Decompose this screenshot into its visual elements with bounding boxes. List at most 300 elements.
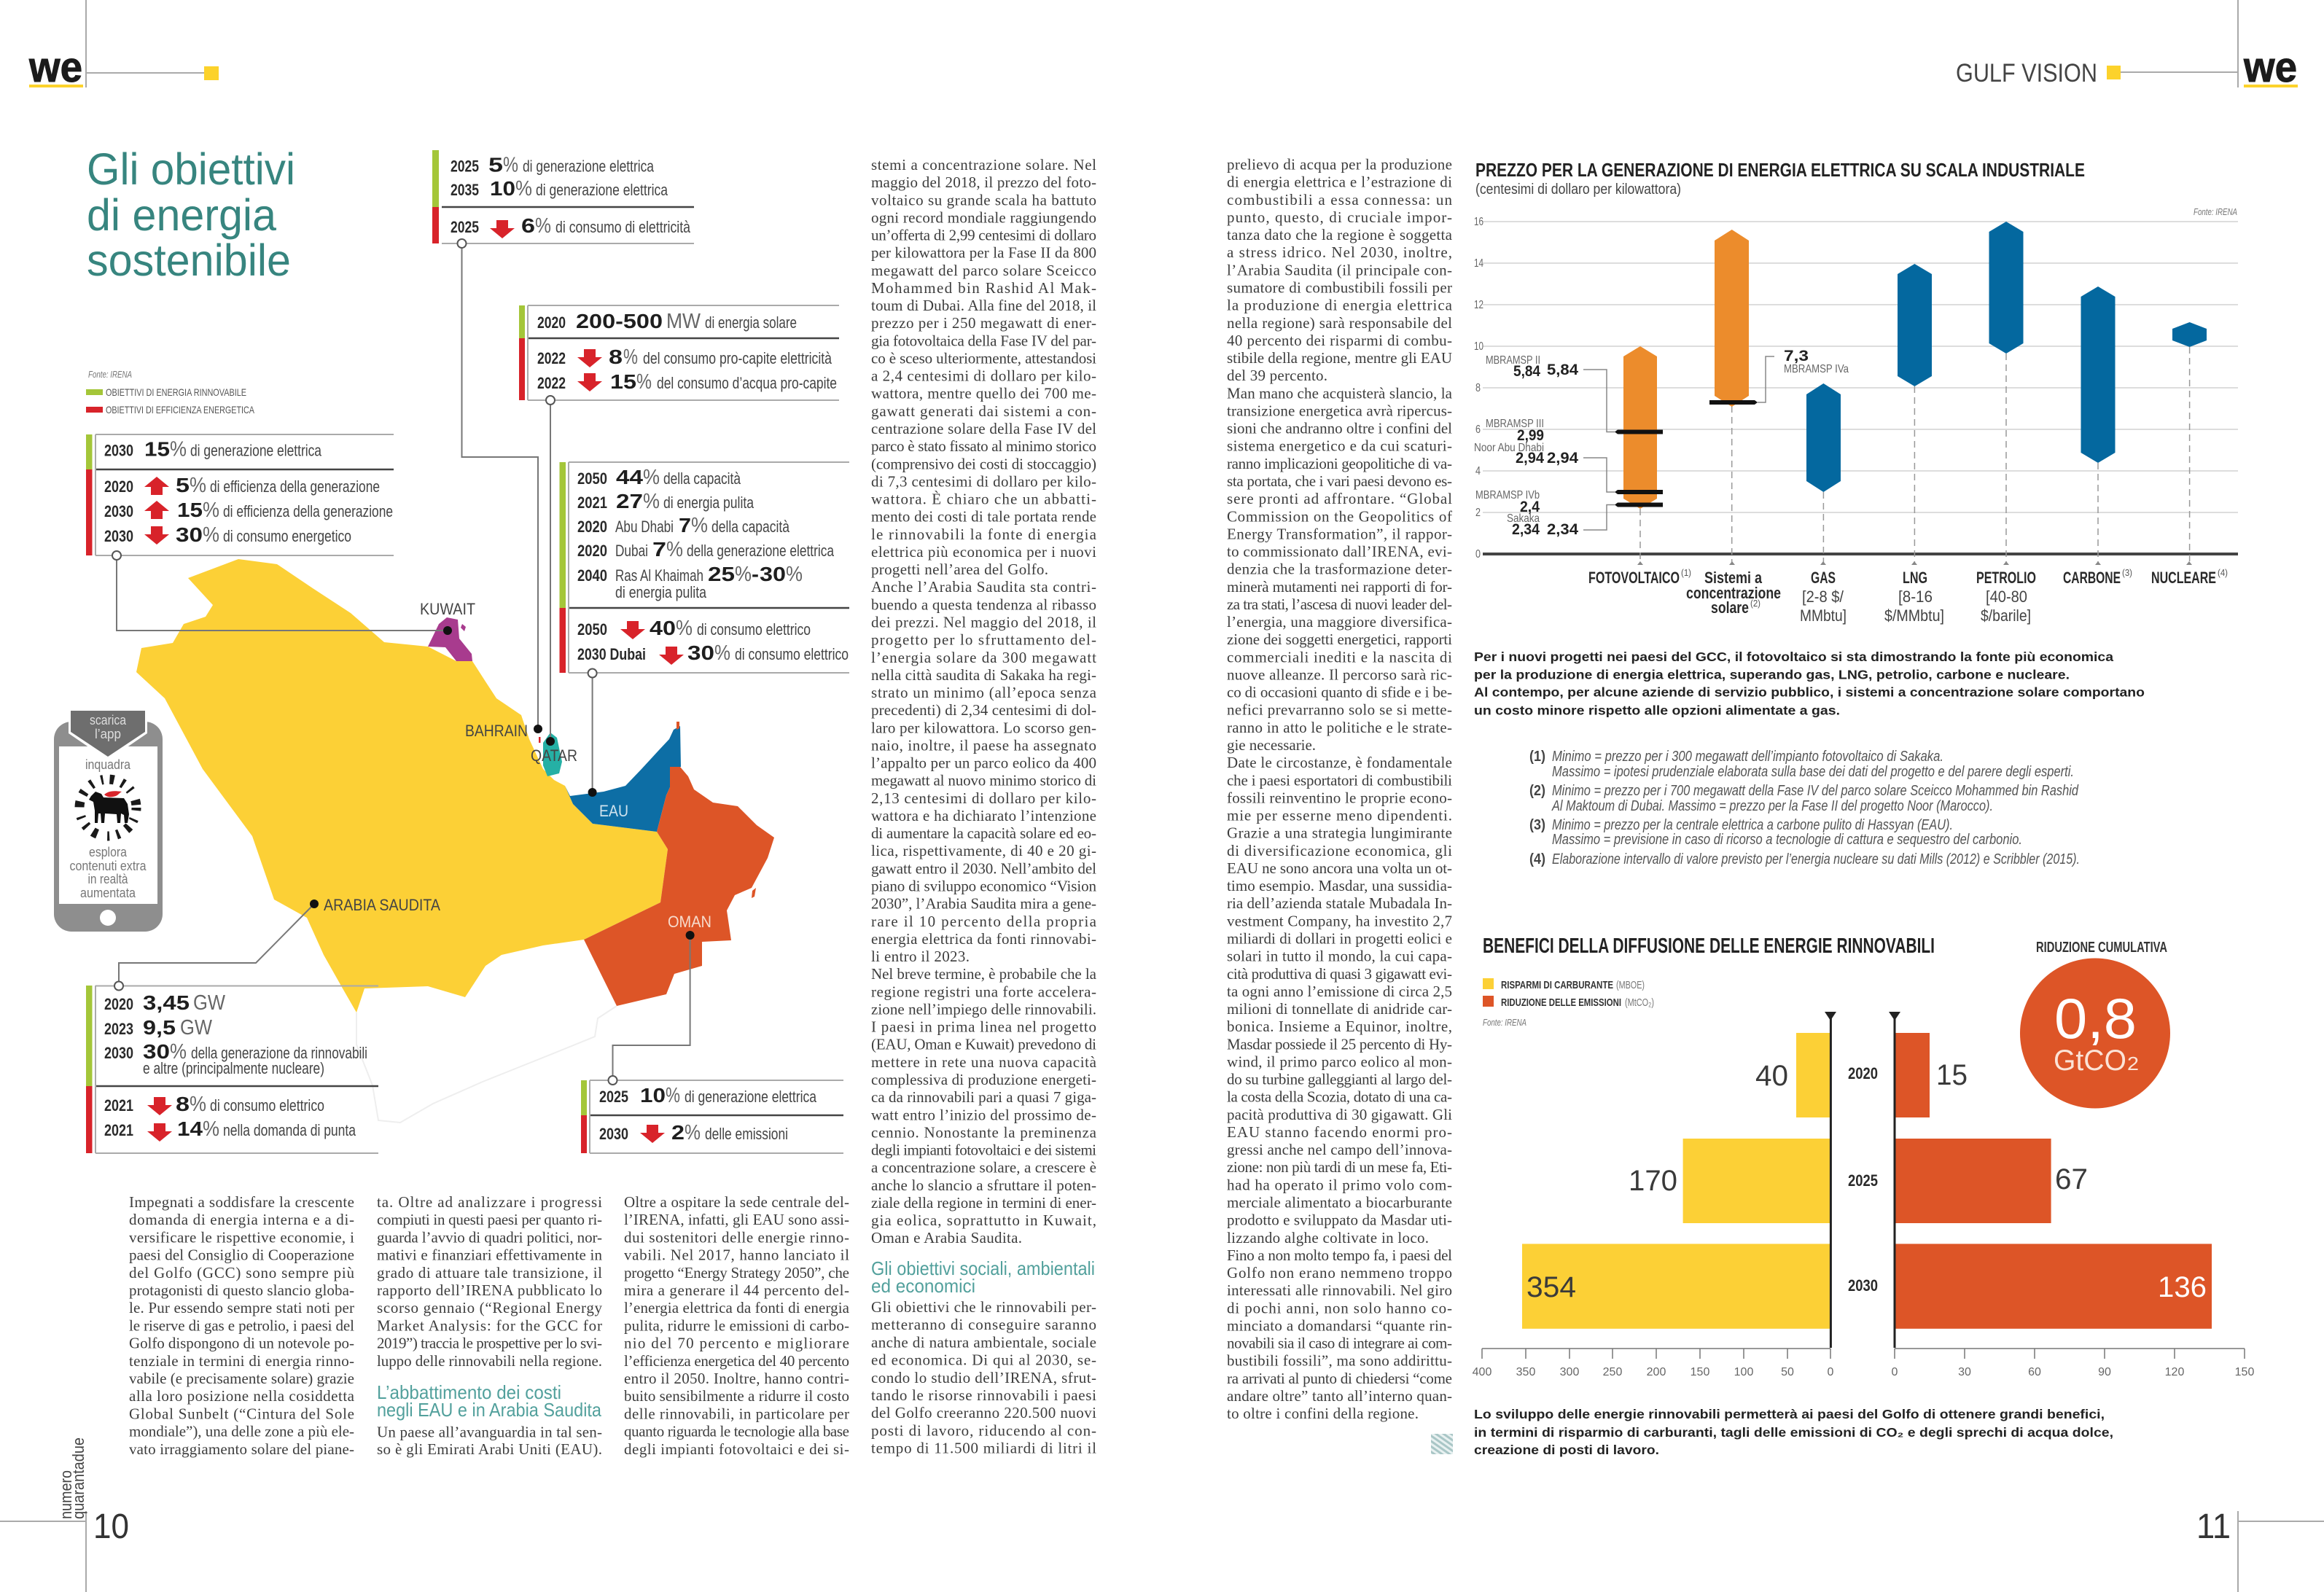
article column 5: di pochi anni, non solo hanno co-	[1227, 1299, 1452, 1316]
article column 3: quanto riguarda le tecnologie alla base	[624, 1423, 849, 1440]
box: UAE targets: %	[643, 490, 660, 513]
bar: solare a concentrazione	[1715, 230, 1749, 407]
icon: phone with augmented reality prompt: aumentata	[80, 886, 136, 900]
article column 5: gressi anche nel campo dell’innova-	[1227, 1141, 1452, 1158]
article column 1	[129, 1193, 355, 1458]
article column 5: novabili sia il caso di integrare ai com-	[1227, 1335, 1452, 1352]
box: UAE targets: %	[735, 563, 752, 586]
article column 5: merciale alimentato a biocarburante	[1227, 1194, 1452, 1211]
box: Kuwait targets: di consumo energetico	[223, 527, 351, 545]
article column 4 upper: gawatt generati dai sistemi a con-	[871, 402, 1096, 420]
map: Oman	[584, 722, 774, 1006]
box: Kuwait targets: 2030	[104, 442, 133, 459]
box: UAE targets: Dubai	[615, 542, 648, 560]
article column 2 upper: 2019”) traccia le prospettive per lo svi-	[377, 1335, 602, 1352]
chart heading: renewable benefits: BENEFICI DELLA DIFFUSIONE DELLE ENERGIE RINNOVABILI	[1483, 934, 1935, 958]
box: Saudi Arabia targets: 14	[177, 1117, 203, 1140]
x axes with scale labels: 60	[2028, 1366, 2041, 1378]
article column 4 upper: ca da rinnovabili pari a quasi 7 giga-	[871, 1088, 1096, 1106]
article column 4 upper: parco è stato fissato al minimo storico	[871, 437, 1096, 455]
box: Bahrain targets: 2035	[451, 181, 479, 199]
article column 4 upper: I paesi in prima linea nel progetto	[871, 1018, 1096, 1036]
box: Bahrain targets: %	[515, 177, 532, 200]
article column 5: to commissionato dall’IRENA, evi-	[1227, 543, 1452, 561]
box: UAE targets	[560, 462, 849, 678]
icon: phone with augmented reality prompt: l’app	[95, 727, 121, 741]
article column 2 upper: luppo delle rinnovabili nella regione.	[377, 1352, 602, 1370]
box: Saudi Arabia targets: della generazione da rinnovabili	[191, 1044, 367, 1062]
x axes with scale labels	[1473, 1349, 2254, 1378]
article column 3: mira a generare il 44 percento del-	[624, 1281, 849, 1299]
article column 4 upper: strato un minimo (all’epoca senza	[871, 684, 1097, 701]
article column 2 upper: guarda l’avvio di quadri politici, nor-	[377, 1228, 602, 1246]
header right: section name and logo: we	[2243, 44, 2297, 91]
central axes	[1825, 1012, 1900, 1348]
box: Saudi Arabia targets: GW	[193, 991, 226, 1015]
chart takeaway text: Al contempo, per alcune aziende di servizio pubblico, i sistemi a concentrazione solare comportano	[1474, 685, 2145, 700]
box: Oman targets: %	[666, 1084, 680, 1107]
benefits takeaway text: in termini di risparmio di carburanti, tagli delle emissioni di CO₂ e degli sprechi di acqua dolce,	[1474, 1425, 2113, 1440]
box: Saudi Arabia targets	[86, 981, 378, 1153]
article column 3: progetto “Energy Strategy 2050”, che	[624, 1264, 849, 1281]
chart grid and y axis labels: 14	[1474, 257, 1483, 270]
box: Saudi Arabia targets: 30	[143, 1040, 170, 1063]
article column 4 upper: buendo a questa tendenza al ribasso	[871, 596, 1096, 613]
article column 4 upper: (EAU, Oman e Kuwait) prevedono di	[871, 1036, 1096, 1053]
article column 1: protagonisti di questo slancio globa-	[129, 1281, 354, 1299]
article column 4 upper: centrazione solare della Fase IV del	[871, 420, 1096, 437]
article column 5: minerà mutamenti nei rapporti di for-	[1227, 578, 1452, 596]
legend: benefits chart	[1483, 978, 1654, 1028]
butterfly bar chart: fuel savings and emission reductions	[1473, 1012, 2254, 1378]
article column 3: pulita, ridurre le emissioni di carbo-	[624, 1316, 849, 1334]
chart heading: electricity generation price: (centesimi di dollaro per kilowattora)	[1475, 182, 1681, 198]
bar: LNG	[1898, 264, 1932, 386]
chart grid and y axis labels: 4	[1475, 465, 1481, 477]
chart takeaway text: Per i nuovi progetti nei paesi del GCC, il fotovoltaico si sta dimostrando la fonte più economica	[1474, 649, 2113, 664]
article column 5: tanza dato che la regione è soggetta	[1227, 226, 1453, 243]
country labels: EAU	[599, 802, 628, 820]
article column 4 upper: zione nell’impiego delle rinnovabili.	[871, 1000, 1096, 1018]
box: UAE targets: -	[752, 563, 759, 585]
year labels	[1848, 1064, 1878, 1295]
category labels: FOTOVOLTAICO	[1588, 569, 1680, 587]
price value labels: 2,94	[1547, 450, 1578, 467]
article column 5: EAU stanno facendo enormi pro-	[1227, 1123, 1452, 1141]
legend: benefits chart: RIDUZIONE DELLE EMISSIONI	[1501, 996, 1621, 1009]
icon: phone with augmented reality prompt	[54, 709, 163, 932]
article column 4 upper: (comprensivo dei costi di stoccaggio)	[871, 455, 1096, 472]
article column 4 upper: rare il 10 percento della propria	[871, 913, 1097, 930]
connector lines from boxes to countries	[117, 248, 690, 1076]
article column 4 upper: regione registri una forte accelera-	[871, 983, 1096, 1000]
icon: phone with augmented reality prompt: in realtà	[87, 872, 128, 886]
title: Gli obiettivi	[87, 144, 295, 194]
header left: logo and crop mark: we	[28, 44, 82, 91]
price value labels: 2,99	[1517, 427, 1544, 444]
article column 4 upper: le rinnovabili la fonte di energia	[871, 526, 1097, 543]
box: UAE targets: della capacità	[663, 469, 741, 488]
article column 3: Oltre a ospitare la sede centrale del-	[624, 1193, 849, 1211]
x axes with scale labels: 30	[1958, 1366, 1971, 1378]
box: Bahrain targets: 6	[521, 214, 535, 237]
category labels: LNG	[1903, 569, 1927, 587]
box: Bahrain targets: 5	[488, 153, 503, 176]
article column 4 upper: elettrica più economica per i nuovi	[871, 543, 1096, 561]
box: UAE targets: 25	[708, 563, 735, 585]
article column 4 upper: Oman e Arabia Saudita.	[871, 1229, 1022, 1246]
article column 1: del Golfo (GCC) sono sempre più	[129, 1264, 354, 1281]
price value labels: MBRAMSP II	[1486, 354, 1540, 367]
box: Oman targets: 2030	[599, 1125, 628, 1143]
country labels: QATAR	[531, 746, 577, 765]
article column 5: timo esempio. Masdar, una sussidia-	[1227, 877, 1452, 894]
callout: cumulative reduction	[2020, 940, 2170, 1108]
price value labels: 2,34	[1547, 521, 1578, 538]
header right: section name and logo	[1956, 0, 2298, 91]
article column 5: nella regione) sarà responsabile del	[1227, 314, 1452, 332]
country labels: OMAN	[668, 913, 711, 931]
title	[87, 144, 295, 285]
article column 1: le. Pur essendo sempre stati noti per	[129, 1299, 354, 1316]
article column 1: Global Sunbelt (“Cintura del Sole	[129, 1405, 354, 1422]
category labels: (4)	[2218, 567, 2228, 578]
legend: benefits chart: RISPARMI DI CARBURANTE	[1501, 979, 1613, 991]
box: Bahrain targets	[432, 150, 694, 248]
article column 4 upper: gawatt entro il 2030. Nell’ambito del	[871, 859, 1096, 877]
price value labels: 5,84	[1547, 362, 1578, 378]
price value labels	[1474, 348, 1849, 538]
article column 4 upper: dei prezzi. Nel maggio del 2018, il	[871, 614, 1096, 631]
article column 4 upper: megawatt al nuovo minimo storico di	[871, 772, 1096, 789]
box: UAE targets: di energia pulita	[663, 493, 754, 512]
article column 5: di diversificazione economica, gli	[1227, 842, 1452, 859]
article column 5: EAU ne sono ancora una volta un ot-	[1227, 859, 1452, 877]
article column 5: cità produttiva di quasi 3 gigawatt evi-	[1227, 965, 1452, 983]
article column 4 upper: toum di Dubai. Alla fine del 2018, il	[871, 297, 1096, 314]
icon: phone with augmented reality prompt: inquadra	[85, 757, 131, 772]
article column 5: sioni che andranno oltre i confini del	[1227, 420, 1452, 437]
article column 4 upper: wattora e ha dichiarato l’intenzione	[871, 807, 1096, 824]
chart grid and y axis labels: 2	[1475, 507, 1481, 519]
article column 4 lower: ed economica. Di qui al 2030, se-	[871, 1351, 1096, 1369]
category labels: (3)	[2122, 567, 2132, 578]
article column 5: mie per esserne meno dipendenti.	[1227, 807, 1452, 824]
article column 1: domanda di energia interna e a di-	[129, 1211, 354, 1228]
box: Oman targets: %	[685, 1121, 701, 1144]
article column 4 upper: progetto per lo sfruttamento del-	[871, 631, 1096, 649]
article column 5: nefici prevarranno solo se si mette-	[1227, 701, 1452, 719]
price value labels: 2,4	[1520, 499, 1540, 515]
bar value labels: 67	[2055, 1163, 2088, 1195]
box: UAE targets: di consumo elettrico	[735, 645, 849, 663]
icon: phone with augmented reality prompt: contenuti extra	[70, 859, 147, 873]
x axes with scale labels: 50	[1781, 1366, 1794, 1378]
box: Saudi Arabia targets: 2023	[104, 1020, 133, 1038]
bar: petrolio	[1989, 222, 2024, 354]
x axes with scale labels: 200	[1647, 1366, 1666, 1378]
box: Saudi Arabia targets: 2021	[104, 1096, 133, 1115]
footnotes: Elaborazione intervallo di valore previsto per l’energia nucleare su dati Mills (2012) e Scribbler (2015).	[1552, 851, 2080, 867]
article column 5: punto, questo, di cruciale impor-	[1227, 208, 1452, 226]
article column 2 upper: rapporto dell’IRENA pubblicato lo	[377, 1281, 602, 1299]
box: UAE targets: della capacità	[711, 518, 790, 536]
subheading: cost reduction: L’abbattimento dei costi	[377, 1381, 561, 1403]
article column 5: nuove alleanze. Il percorso sarà ric-	[1227, 666, 1452, 683]
axis tick markers	[1637, 561, 2192, 565]
article column 4 upper: per kilowattora per la Fase II da 800	[871, 244, 1096, 262]
box: Qatar targets: di energia solare	[705, 313, 797, 332]
box: Saudi Arabia targets: nella domanda di punta	[223, 1121, 356, 1139]
category labels: GAS	[1811, 569, 1836, 587]
article column 4 upper: nella città saudita di Sakaka ha regi-	[871, 666, 1096, 684]
box: Saudi Arabia targets: di consumo elettrico	[210, 1096, 324, 1115]
article column 5: bonica. Insieme a Equinor, inoltre,	[1227, 1018, 1452, 1035]
box: Qatar targets: MW	[666, 310, 701, 333]
bar value labels: 40	[1755, 1060, 1788, 1092]
box: UAE targets: %	[643, 466, 660, 489]
article column 5: milioni di tonnellate di anidride car-	[1227, 1000, 1452, 1018]
box: Kuwait targets: 2030	[104, 502, 133, 520]
box: Oman targets: 2025	[599, 1088, 628, 1106]
box: Saudi Arabia targets: %	[203, 1117, 219, 1141]
article column 5: Grazie a una strategia lungimirante	[1227, 824, 1452, 842]
chart takeaway text: un costo minore rispetto alle opzioni alimentate a gas.	[1474, 703, 1840, 717]
article column 4 upper: voltaico su grande scala ha battuto	[871, 191, 1096, 208]
footer right: page number: 11	[2196, 1507, 2231, 1546]
category labels: PETROLIO	[1976, 569, 2036, 587]
box: Saudi Arabia targets: %	[170, 1040, 187, 1064]
article column 2 lower: Un paese all’avanguardia in tal sen-	[377, 1423, 602, 1440]
article column 5: ta ogni anno l’emissione di circa 2,5	[1227, 983, 1452, 1000]
article column 4 upper: piano di sviluppo economico “Vision	[871, 878, 1097, 895]
article column 3: nio del 70 percento e migliorare	[624, 1335, 849, 1352]
legend: OBIETTIVI DI ENERGIA RINNOVABILE	[106, 386, 246, 398]
box: Kuwait targets	[86, 434, 394, 560]
article column 4 upper: di 7,3 centesimi di dollaro per kilo-	[871, 472, 1096, 490]
article column 4 lower: Gli obiettivi che le rinnovabili per-	[871, 1298, 1096, 1316]
article column 5: had ha operato il primo volo com-	[1227, 1176, 1452, 1193]
box: Qatar targets: 2020	[537, 313, 566, 332]
box: Kuwait targets: 5	[176, 474, 190, 496]
price value labels: 7,3	[1784, 348, 1809, 364]
article column 3: degli impianti fotovoltaici e dei si-	[624, 1440, 849, 1458]
x axes with scale labels: 250	[1603, 1366, 1622, 1378]
footnotes: Massimo = previsione in caso di ricorso a tecnologie di cattura e sequestro del carbonio.	[1552, 832, 2022, 848]
callout: cumulative reduction: 0,8	[2054, 986, 2137, 1050]
x axes with scale labels: 150	[1691, 1366, 1709, 1378]
article column 4 upper: a concentrazione solare, a crescere è	[871, 1159, 1096, 1177]
box: Qatar targets: 2022	[537, 374, 566, 392]
article column 4 upper: stemi a concentrazione solare. Nel	[871, 156, 1096, 173]
article column 5: che i paesi esportatori di combustibili	[1227, 771, 1452, 789]
article column 4 upper: 2,13 centesimi di dollaro per kilo-	[871, 789, 1096, 807]
footer left: issue label and page number: 10	[93, 1507, 129, 1546]
article column 5: fossili reinventino le proprie econo-	[1227, 789, 1452, 806]
article column 4 upper: progetti nell’area del Golfo.	[871, 561, 1048, 578]
article column 5: bustibili fossili”, ma sono addirittu-	[1227, 1352, 1452, 1370]
footnotes: (1)	[1529, 749, 1545, 765]
article column 3: l’IRENA, infatti, gli EAU sono assi-	[624, 1211, 849, 1228]
subheading: social, environmental and economic goals: Gli obiettivi sociali, ambientali	[871, 1257, 1095, 1279]
box: UAE targets: 2021	[577, 493, 607, 512]
subheading: cost reduction	[377, 1381, 601, 1421]
article column 1: vabile (e precisamente solare) grazie	[129, 1370, 354, 1387]
country labels: KUWAIT	[420, 600, 475, 618]
box: Kuwait targets: 2030	[104, 527, 133, 545]
article column 4 upper: di aumentare la capacità solare ed eo-	[871, 824, 1096, 842]
price value labels: MBRAMSP IVb	[1475, 489, 1540, 502]
box: UAE targets: della generazione elettrica	[687, 542, 835, 560]
article column 1: paesi del Consiglio di Cooperazione	[129, 1246, 354, 1264]
callout: cumulative reduction: GtCO	[2054, 1045, 2126, 1077]
article column 5: minciato a domandarsi “quante rin-	[1227, 1316, 1452, 1334]
bar: fotovoltaico	[1623, 346, 1657, 509]
box: Kuwait targets: di efficienza della generazione	[210, 477, 380, 496]
article column 2 upper: compiuti in questi paesi per quanto ri-	[377, 1211, 602, 1228]
x axes with scale labels: 100	[1734, 1366, 1753, 1378]
article column 4 upper: precedenti) di 2,34 centesimi di dol-	[871, 701, 1096, 719]
box: UAE targets: Abu Dhabi	[615, 518, 674, 536]
box: Kuwait targets: %	[203, 499, 219, 522]
article column 4 upper: a 2,4 centesimi di dollaro per kilo-	[871, 367, 1096, 385]
article column 3: delle rinnovabili, in particolare per	[624, 1405, 849, 1422]
footer left: issue label and page number	[0, 1437, 129, 1592]
article column 5: solari in tutto il mondo, la cui capa-	[1227, 948, 1452, 965]
chart heading: electricity generation price	[1475, 159, 2237, 217]
article column 5: ranno in atto le politiche e le strate-	[1227, 719, 1452, 736]
article column 2 lower	[377, 1423, 602, 1458]
box: Bahrain targets: %	[535, 214, 551, 238]
footnotes: (3)	[1529, 817, 1545, 833]
article column 5: vestment Company, ha investito 2,7	[1227, 912, 1452, 929]
box: Saudi Arabia targets: 2030	[104, 1044, 133, 1062]
category labels: CARBONE	[2063, 569, 2121, 587]
article column 5: ra arrivati al punto di chiedersi “come	[1227, 1370, 1452, 1387]
dashed drop lines	[1640, 347, 2190, 563]
article column 1: vato irraggiamento solare del piane-	[129, 1440, 354, 1458]
map: Saudi Arabia	[136, 559, 668, 1012]
category labels: (1)	[1681, 567, 1691, 578]
article column 5: del 39 percento.	[1227, 367, 1327, 384]
article column 5: ranno implicazioni geopolitiche di va-	[1227, 455, 1452, 472]
article column 5: pacità produttiva di 30 gigawatt. Gli	[1227, 1106, 1452, 1123]
article column 4 upper: prezzo per i 250 megawatt di ener-	[871, 314, 1096, 332]
footnotes: Minimo = prezzo per la centrale elettrica a carbone pulito di Hassyan (EAU).	[1552, 817, 1953, 833]
article column 5: sta portata, che i vari paesi devono es-	[1227, 472, 1452, 490]
article column 5: Energy Transformation”, il rappor-	[1227, 525, 1452, 542]
article column 1: alla loro posizione nella cosiddetta	[129, 1387, 355, 1405]
box: Kuwait targets: %	[203, 523, 219, 547]
country dots	[310, 626, 695, 940]
box: Kuwait targets: %	[170, 437, 187, 461]
box: Qatar targets: del consumo d’acqua pro-capite	[657, 374, 837, 392]
box: UAE targets: 2020	[577, 518, 607, 536]
article column 4 lower: tando le risorse rinnovabili i paesi	[871, 1386, 1096, 1404]
box: UAE targets: 7	[679, 514, 691, 536]
article column 5: 40 percento dei risparmi di combu-	[1227, 332, 1452, 349]
map: Bahrain	[539, 737, 541, 743]
box: UAE targets: 44	[616, 466, 643, 488]
article column 5: Date le circostanze, è fondamentale	[1227, 754, 1452, 771]
article column 5: do su turbine galleggianti al largo del-	[1227, 1071, 1452, 1088]
box: UAE targets: 27	[616, 490, 643, 512]
box: Oman targets: di generazione elettrica	[685, 1088, 817, 1106]
article column 4 upper	[871, 156, 1097, 1246]
category labels: NUCLEARE	[2151, 569, 2216, 587]
article column 4 lower: anche di natura ambientale, sociale	[871, 1333, 1096, 1351]
title: di energia	[87, 190, 276, 240]
chart takeaway text: per la produzione di energia elettrica, superando gas, LNG, petrolio, carbone e nucleare.	[1474, 668, 2070, 682]
bars: fuel savings	[1522, 1033, 1830, 1329]
article column 4 upper: ziale della regione in termini di ener-	[871, 1194, 1096, 1211]
x axes with scale labels: 0	[1892, 1366, 1898, 1378]
article column 2 upper: mativi e finanziari effettivamente in	[377, 1246, 602, 1264]
article column 3: vabili. Nel 2017, hanno lanciato il	[624, 1246, 849, 1264]
article column 3: buito sensibilmente a ridurre il costo	[624, 1387, 849, 1405]
footnotes	[1529, 749, 2080, 867]
box: UAE targets: 30	[687, 641, 714, 664]
map: Kuwait	[428, 617, 472, 661]
box: Bahrain targets: 2025	[451, 157, 479, 175]
box: Kuwait targets: di generazione elettrica	[190, 442, 322, 459]
bar: nucleare	[2172, 322, 2207, 347]
callout: cumulative reduction: RIDUZIONE CUMULATIVA	[2036, 940, 2167, 956]
x axes with scale labels: 150	[2235, 1366, 2254, 1378]
box: UAE targets: 30	[760, 563, 786, 585]
icon: phone with augmented reality prompt: esplora	[89, 845, 128, 859]
article column 4 upper: ogni record mondiale raggiungendo	[871, 208, 1096, 226]
chart grid and y axis labels: 10	[1474, 340, 1483, 353]
article column 5: l’energia, una maggiore diversifica-	[1227, 613, 1452, 631]
box: UAE targets: %	[786, 563, 803, 586]
box: Saudi Arabia targets: 3,45	[143, 991, 190, 1014]
country labels	[324, 600, 711, 931]
box: UAE targets: 40	[650, 617, 676, 639]
article column 5: zione: non più tardi di un mese fa, Eti-	[1227, 1158, 1452, 1176]
article column 3: dui sostenitori delle energie rinno-	[624, 1228, 849, 1246]
article column 3: l’efficienza energetica del 40 percento	[624, 1352, 849, 1370]
article column 5: Commission on the Geopolitics of	[1227, 507, 1452, 525]
footnotes: Minimo = prezzo per i 300 megawatt dell’impianto fotovoltaico di Sakaka.	[1552, 749, 1943, 765]
country labels: BAHRAIN	[465, 722, 528, 740]
article column 5: miliardi di dollari in progetti eolici e	[1227, 930, 1452, 947]
article column 1: mondiale”), una delle zone a più ele-	[129, 1423, 354, 1440]
article column 4 upper: degli impianti fotovoltaici e dei sistemi	[871, 1142, 1096, 1159]
box: Saudi Arabia targets: 2021	[104, 1121, 133, 1139]
chart grid and y axis labels: 0	[1475, 548, 1481, 561]
bar value labels: 354	[1526, 1271, 1576, 1303]
legend	[86, 369, 255, 415]
article column 5: a stress idrico. Nel 2030, inoltre,	[1227, 243, 1452, 261]
box: UAE targets: di consumo elettrico	[697, 620, 811, 639]
article column 5: l’Arabia Saudita (il principale con-	[1227, 261, 1452, 278]
box: Bahrain targets: di consumo di elettricità	[555, 218, 691, 236]
footnotes: Massimo = ipotesi prudenziale elaborata sulla base dei dati del progetto e del parere degli esperti.	[1552, 764, 2074, 780]
article column 3	[624, 1193, 850, 1458]
bar value labels	[1526, 1059, 2207, 1303]
article column 4 upper: Nel breve termine, è probabile che la	[871, 965, 1097, 983]
article column 4 upper: 2030”, l’Arabia Saudita mira a gene-	[871, 895, 1096, 913]
article column 5: commerciali inediti e la nascita di	[1227, 648, 1452, 666]
x axes with scale labels: 0	[1828, 1366, 1834, 1378]
box: Qatar targets: 8	[609, 346, 623, 368]
title: sostenibile	[87, 235, 291, 285]
article column 4 upper: wattora. È chiaro che un abbatti-	[871, 491, 1096, 508]
category labels: concentrazione	[1686, 584, 1781, 602]
article column 4 lower: condo lo studio dell’IRENA, sfrut-	[871, 1369, 1096, 1386]
box: Kuwait targets: 15	[177, 499, 203, 521]
